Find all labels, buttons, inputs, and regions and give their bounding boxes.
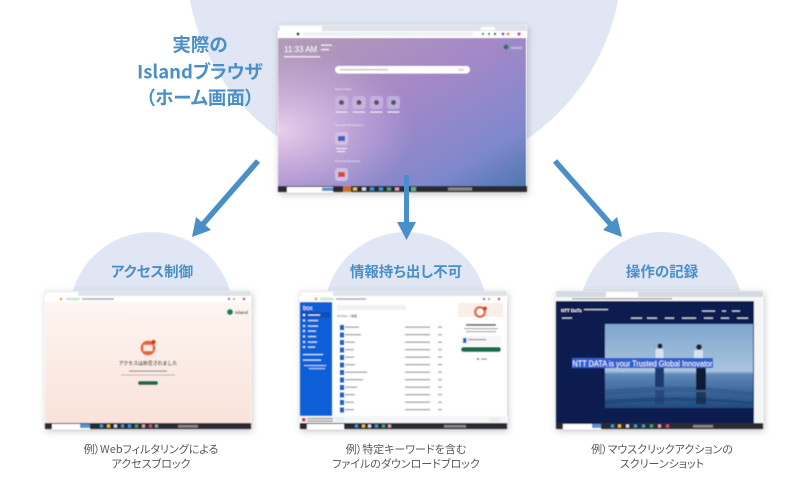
screenshot: NTT DATA page capture [556,291,763,429]
tab strip [45,291,251,296]
page background [45,302,251,423]
taskbar [556,423,763,429]
background circle: no data exfiltration [324,232,488,396]
Island logo [504,44,522,50]
screenshot: file download blocked [300,291,507,429]
address bar [556,297,763,301]
heading: actual Island browser home screen: （ホーム画面） [146,84,254,110]
screenshot: access blocked [45,291,251,429]
Island logo: Island [235,310,248,315]
background circle: top [186,0,622,177]
blocked icon [140,340,156,356]
highlighted headline: NTT DATA is your Trusted Global Innovator [572,358,713,368]
arrow: to access control [192,159,260,237]
heading: activity log: 操作の記録 [626,261,699,282]
caption: keyword download block: ファイルのダウンロードブロック [332,456,480,472]
caption: web filtering: 例）Webフィルタリングによる [84,441,218,457]
arrow: to activity log [553,159,622,237]
heading: no data exfiltration: 情報持ち出し不可 [350,261,462,282]
person left [655,344,664,404]
clock [284,44,332,58]
hero image [605,324,753,408]
tab strip [556,291,763,297]
page background [556,301,754,423]
box sidebar [300,302,332,416]
nav bar [562,309,748,319]
heading: actual Island browser home screen: Islandブラウザ [137,58,264,84]
search field [337,305,406,310]
arrow: to no data exfiltration [397,175,416,240]
heading: access control: アクセス制御 [111,261,193,282]
heading: actual Island browser home screen [137,32,264,110]
background circle: access control [70,232,234,396]
caption: web filtering [84,441,218,472]
screenshot: Island browser home [278,25,527,192]
caption: mouse click screenshot: 例）マウスクリックアクションの [591,441,733,457]
box sidebar: box [303,306,313,312]
Island logo: Island [511,45,522,50]
Island logo [227,309,248,315]
continue button [138,381,158,385]
caption: keyword download block: 例）特定キーワードを含む [346,441,467,457]
screenshot: file download blocked: All Files > 保護 [337,313,357,318]
blocked popup [458,303,503,363]
person right [694,344,706,404]
app tiles: Most Visited [335,87,352,91]
download bar [300,416,507,423]
address bar [300,296,507,302]
caption: mouse click screenshot: スクリーンショット [620,456,704,472]
taskbar [45,423,251,429]
address bar [278,31,527,38]
caption: keyword download block [332,441,480,472]
search box [335,66,470,74]
taskbar [300,423,507,429]
caption: web filtering: アクセスブロック [112,456,190,472]
browser tab strip [278,25,527,31]
app tiles: Personal Browsing [335,159,360,163]
app tiles: Secured Workspaces [335,123,364,127]
taskbar [278,186,527,192]
wallpaper [278,38,526,186]
background circle: activity log [580,232,744,396]
NTT DATA logo: NTT DaTa [561,308,582,313]
heading: actual Island browser home screen: 実際の [172,32,228,58]
blocked message: アクセスは拒否されました [119,360,177,367]
address bar [45,296,251,302]
app tiles [335,87,400,181]
side panel [754,301,763,423]
clock: 11:33 AM [284,45,318,54]
tab strip [300,291,507,296]
caption: mouse click screenshot [591,441,733,472]
file list [340,325,442,412]
